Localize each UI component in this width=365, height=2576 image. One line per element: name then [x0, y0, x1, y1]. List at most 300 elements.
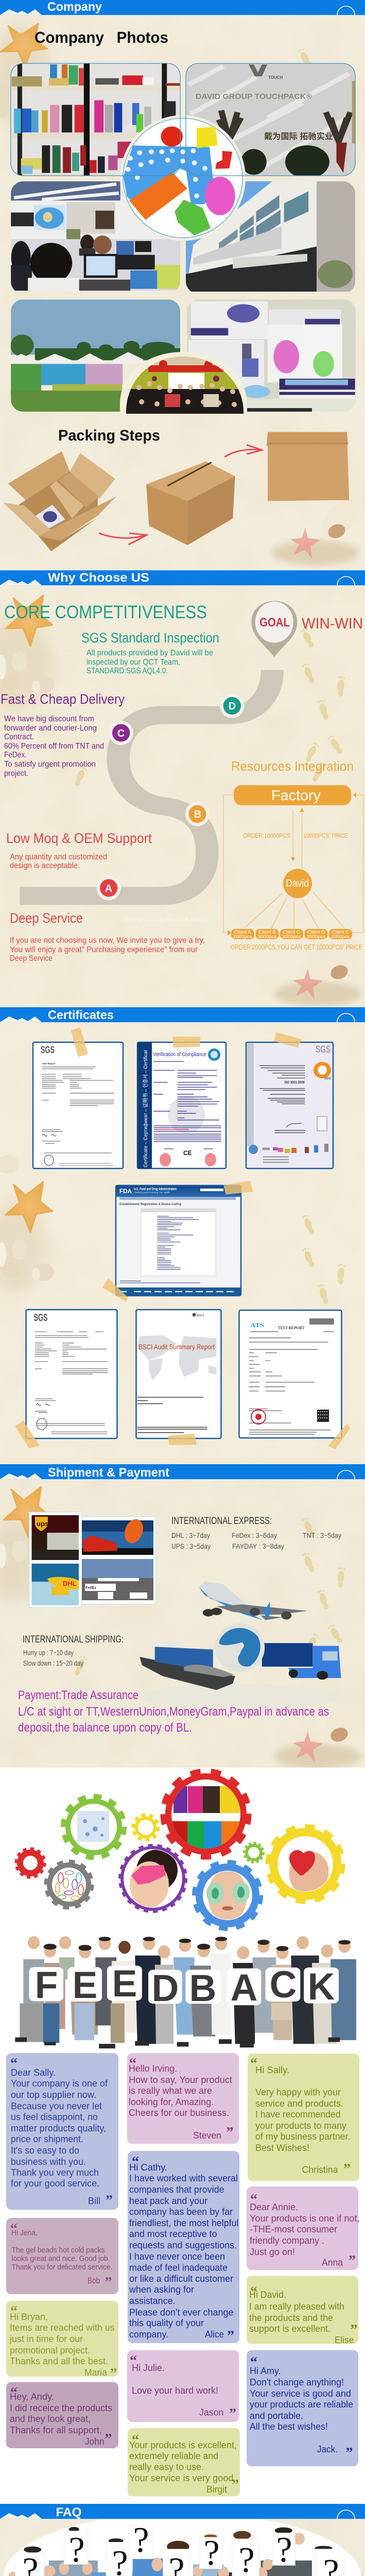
people group — [15, 1936, 356, 2048]
testimonial: Bill: our top supplier now. — [11, 2089, 96, 2100]
certificate: ATS test report: ATS — [250, 1321, 264, 1329]
decoration: seashell company — [0, 83, 11, 118]
testimonial: Alice: friendliest, the most helpful — [129, 2217, 239, 2228]
testimonial: Elise: support is excellent. — [249, 2323, 331, 2334]
testimonial: Jack: and portable. — [250, 2410, 303, 2421]
testimonial: Steven: How to say, Your product — [129, 2074, 232, 2085]
testimonial: Bob: “ — [10, 2221, 18, 2237]
certificate: FDA listing: Protecting and Promoting Your Health — [134, 1191, 170, 1194]
node: clients — [231, 929, 352, 940]
panel: sand background company section — [0, 15, 365, 570]
testimonial: Elise: I am really pleased with — [249, 2301, 344, 2312]
certificate: ISO 9001: ISO 9001:2008 — [284, 1080, 305, 1084]
gear: grey with carabiners — [46, 1862, 92, 1907]
photo panel outlines — [11, 63, 355, 176]
testimonial: Alice — [128, 2151, 239, 2344]
decoration: darker sand left side — [0, 26, 51, 1602]
heading: core competitiveness: CORE COMPETITIVENESS — [4, 602, 207, 622]
testimonial: Bob — [6, 2218, 118, 2294]
section header: FAQ — [0, 2504, 365, 2519]
testimonial: Bill: Thank you very much — [11, 2167, 99, 2178]
testimonial: John: “ — [10, 2385, 18, 2401]
testimonial: Bob: Hi Jena, — [11, 2229, 38, 2237]
badge B — [185, 802, 210, 826]
block: international express: DHL : 3~7day — [171, 1531, 210, 1539]
block: international shipping: Hurry up : 7~10 day — [23, 1649, 74, 1657]
block: international express: FAYDAY : 3~8day — [232, 1542, 284, 1550]
decoration: conch and pink starfish shipment — [274, 1695, 365, 1769]
testimonial: Maria: Thanks and all the best. — [10, 2355, 108, 2366]
testimonial: Alice: Hi Cathy. — [129, 2162, 167, 2173]
chart: resources integration diagram — [223, 758, 363, 951]
block: international shipping: INTERNATIONAL SHIPPING: — [23, 1634, 124, 1645]
decoration: seashells why choose us — [0, 652, 54, 693]
block: low moq and OEM support: Any quantity and customized — [10, 853, 107, 861]
testimonial: Jason: Love your hard work! — [132, 2385, 218, 2396]
icon: goal pin: GOAL — [259, 616, 290, 630]
decoration: starfish why choose us — [6, 596, 53, 646]
node: clients: 2000pcs — [307, 934, 325, 940]
testimonial: Christina: service and products. — [255, 2098, 343, 2109]
node: clients: 2000pcs — [258, 934, 276, 940]
testimonial: Steven: Hello Irving. — [129, 2063, 177, 2074]
testimonial: Alice: I have never once been — [129, 2251, 225, 2262]
certificate: FDA listing: U.S. Food and Drug Administration — [134, 1188, 177, 1191]
icon: truck — [262, 1643, 341, 1680]
certificate: verification of compliance: Certificate – Сертификат – 证明书 – 인증서 – Certificat — [143, 1050, 149, 1167]
node: factory: Factory — [271, 787, 321, 803]
block: international express: FeDex : 3~6day — [232, 1531, 277, 1539]
testimonial: Elise: “ — [250, 2284, 257, 2300]
word: FEEDBACK: C — [270, 1964, 297, 2006]
node: clients: Client D — [307, 929, 325, 935]
word: FEEDBACK: F — [35, 1964, 58, 2006]
testimonial: Maria: just in time for our — [9, 2333, 83, 2344]
block: international express — [171, 1516, 341, 1550]
testimonial: Steven: ” — [227, 2125, 234, 2141]
gear: small yellow — [133, 1815, 158, 1840]
label: order 10000: ORDER:10000PCS — [243, 832, 290, 839]
testimonial: Christina: of my business partner. — [255, 2131, 350, 2142]
certificate: SGS report: SGS — [41, 1045, 55, 1056]
sand grain company — [0, 15, 365, 570]
testimonial: Bob: Thank you for delicated service. — [11, 2263, 112, 2272]
block: fast and cheap delivery: To satisfy urgent promotion — [4, 760, 96, 769]
testimonial: Birgit: Your service is very good — [129, 2472, 234, 2483]
node: factory — [234, 785, 351, 805]
block: low moq and OEM support: design is acceptable. — [10, 861, 80, 870]
testimonial: Maria: Hi Bryan, — [10, 2311, 48, 2322]
connector lines — [223, 795, 363, 933]
block: deep service: You will enjoy a great" Purchasing experience" from our — [10, 945, 198, 954]
block: SGS standard inspection: STANDARD:SGS AQL4.0. — [86, 667, 168, 675]
panel: sand background why choose us section — [0, 585, 365, 1007]
testimonial: Alice: or like a difficult customer — [129, 2273, 233, 2284]
block: fast and cheap delivery: 60% Percent off from TNT and — [4, 742, 104, 751]
certificate: BSCI audit report — [136, 1310, 221, 1438]
node: clients: 2000pcs — [233, 934, 252, 940]
photo: office — [11, 181, 180, 292]
photo: FedEx orange plane — [82, 1517, 153, 1555]
testimonial: Bill: matter products quality, — [11, 2123, 106, 2133]
testimonial: Birgit: really easy to use. — [129, 2462, 204, 2472]
icon: airplane — [199, 1582, 307, 1620]
gear: blue with gel eye pads — [195, 1863, 260, 1928]
photo: UPS — [32, 1515, 79, 1560]
block: international shipping — [23, 1634, 124, 1667]
testimonial: John — [6, 2382, 118, 2448]
testimonial: Steven: Steven — [193, 2130, 221, 2141]
testimonial: Bill: ” — [106, 2193, 113, 2209]
gear: yellow with heart pack — [269, 1827, 342, 1901]
badge D — [220, 693, 244, 718]
testimonial: Bill: price or shipment. — [11, 2133, 83, 2144]
testimonial: Jack: Your service is good and — [250, 2388, 351, 2399]
client arrows — [245, 892, 344, 929]
certificate: verification of compliance: CE — [183, 1149, 192, 1157]
testimonial: Birgit — [128, 2428, 240, 2497]
certificate: ISO 9001: SGS — [324, 1077, 331, 1080]
testimonial: Bill: Because you never let — [11, 2100, 102, 2111]
testimonial: Maria — [6, 2301, 118, 2382]
decoration: conch and pink starfish why choose us — [274, 933, 365, 1006]
testimonial: Bill: for your good service. — [11, 2178, 99, 2189]
photo: product shelves — [11, 63, 180, 176]
testimonial: John: Hey, Andy. — [10, 2391, 54, 2402]
block: fast and cheap delivery: project. — [4, 769, 28, 778]
node: clients: 2000pcs — [282, 934, 301, 940]
word: FEEDBACK: E — [73, 1964, 97, 2006]
decoration: starfish shipment — [4, 1487, 50, 1537]
testimonial: Steven: Cheers for our business. — [129, 2107, 229, 2118]
gear: small green — [245, 1843, 263, 1862]
testimonial: Alice: assistance. — [129, 2295, 175, 2306]
road path — [20, 670, 272, 896]
sand mottling shipment — [0, 1479, 365, 1768]
question marks — [22, 2520, 339, 2576]
testimonial: Jack: Don't change anything! — [250, 2377, 344, 2387]
testimonial: Anna: Just go on! — [250, 2246, 295, 2257]
testimonial: Jack: Jack. — [317, 2444, 338, 2454]
testimonial: John: ” — [105, 2431, 112, 2447]
letter cards — [29, 1965, 339, 2005]
word: FEEDBACK: B — [189, 1968, 216, 2009]
certificate: FDA listing — [116, 1185, 241, 1296]
testimonial: John: John — [85, 2436, 104, 2447]
testimonial: Maria: Maria — [84, 2367, 108, 2378]
testimonial: Christina — [248, 2054, 359, 2181]
testimonial: Bill: business with you. — [11, 2156, 86, 2167]
block: low moq and OEM support: Low Moq & OEM Support — [6, 831, 152, 846]
certificate: BSCI audit report: BSCI Audit Summary Report — [138, 1343, 215, 1351]
panel: sand background FAQ section — [0, 2519, 365, 2576]
gear: green with clear bag — [64, 1797, 124, 1857]
photo: David Group wall: DAVID GROUP TOUCHPACK® — [196, 92, 312, 101]
icon: sealed carton — [267, 432, 349, 501]
certificate: FDA listing: Establishment Registration & Device Listing — [119, 1202, 181, 1206]
sand mottling why choose us — [0, 585, 365, 1007]
word: FEEDBACK: A — [231, 1967, 257, 2009]
watermark: designed by freepik.com — [124, 917, 205, 923]
testimonial: Steven: “ — [129, 2056, 136, 2072]
block: fast and cheap delivery: Fast & Cheap Delivery — [1, 691, 125, 707]
section header: FAQ: FAQ — [56, 2505, 81, 2519]
sand grain FAQ — [0, 2519, 365, 2576]
testimonial: Bob: looks great and nice. Good job. — [11, 2255, 110, 2263]
testimonial: Elise: the products and the — [249, 2312, 333, 2323]
testimonial: Christina: “ — [250, 2056, 257, 2072]
section header: Company: Company — [47, 0, 102, 14]
certificate: SGS report — [33, 1042, 123, 1168]
testimonial: Elise: ” — [350, 2322, 357, 2338]
node: clients: Client C — [283, 929, 300, 935]
photo: DHL: DHL — [63, 1580, 77, 1587]
gear: small red — [16, 1849, 44, 1877]
testimonial: Alice: ” — [227, 2328, 234, 2344]
testimonial: Jason: Hi Julie. — [132, 2362, 165, 2373]
testimonial: Jack: All the best wishes! — [250, 2421, 328, 2432]
photo: people holding question marks — [4, 2513, 361, 2576]
question marks: ? — [68, 2530, 85, 2570]
photo: DHL — [32, 1564, 79, 1605]
block: payment terms: Payment:Trade Assurance — [18, 1688, 138, 1702]
photo: retail packaging — [186, 299, 356, 413]
certificate: FDA listing: FDA — [119, 1188, 132, 1195]
certificate: verification of compliance: Verification of Compliance — [153, 1052, 206, 1058]
testimonial: Alice: made of feel inadequate — [129, 2262, 228, 2273]
certificate: SGS report two — [26, 1310, 117, 1438]
certificate: verification of compliance — [137, 1042, 226, 1168]
block: fast and cheap delivery: We have big discount from — [4, 715, 94, 723]
sand mottling FAQ — [0, 2519, 365, 2576]
word: FEEDBACK: K — [308, 1966, 335, 2008]
testimonial: Jack: your products are reliable — [250, 2399, 353, 2410]
certificate: ATS test report: TEST REPORT — [278, 1326, 305, 1330]
decoration: seashells certificates top — [0, 1155, 19, 1174]
certificate: BSCI audit report: BSCI — [197, 1314, 204, 1317]
photo: team outing — [10, 299, 180, 413]
block: fast and cheap delivery: Contract. — [4, 733, 34, 741]
testimonial: John: Thanks for all support. — [10, 2425, 102, 2435]
arrow: carton step one to two — [99, 533, 147, 545]
word: FEEDBACK: D — [152, 1968, 179, 2009]
photo: FedEx fleet: FedEx — [85, 1586, 96, 1590]
badge C — [109, 721, 133, 745]
section header: Certificates — [0, 1007, 365, 1023]
testimonial: Maria: ” — [110, 2366, 117, 2382]
sand mottling certificates — [0, 1022, 365, 1464]
testimonial: Jason: ” — [229, 2406, 236, 2422]
block: fast and cheap delivery — [1, 691, 125, 778]
testimonial: Maria: Items are reached with us — [10, 2322, 114, 2333]
testimonial: Bill: It's so easy to do — [11, 2145, 79, 2156]
node: clients: 2000pcs — [331, 934, 350, 940]
block: SGS standard inspection: SGS Standard Inspection — [81, 630, 219, 646]
arrowheads — [228, 792, 356, 936]
decoration: tapes on certificates — [15, 1027, 351, 1449]
testimonial: Anna: Anna — [322, 2257, 343, 2268]
photo: company building — [186, 181, 355, 292]
testimonial: Jack — [247, 2350, 358, 2466]
decoration: seashells shipment — [0, 1540, 54, 1582]
testimonial: Steven — [127, 2053, 239, 2144]
heading: Company Photos: Company Photos — [34, 28, 168, 46]
photo: annual meeting group — [120, 352, 247, 415]
heading: resources integration: Resources Integration — [231, 758, 354, 774]
sand grain certificates — [0, 1022, 365, 1464]
question marks: ? — [276, 2530, 292, 2570]
white cut below shipment section — [0, 1768, 365, 1799]
certificate: SGS report two: SGS — [34, 1312, 47, 1324]
block: low moq and OEM support — [6, 831, 152, 870]
testimonial: Alice: this quality of your — [129, 2317, 204, 2328]
section header: Shipment and Payment — [0, 1464, 365, 1480]
sand mottling company — [0, 15, 365, 570]
block: deep service: Deep Service — [10, 910, 83, 926]
testimonial: Anna: friendly company . — [250, 2235, 324, 2246]
testimonial: Bill: us feel disappoint, no — [11, 2111, 98, 2122]
decoration: starfish company — [1, 24, 47, 66]
testimonial: Bill — [6, 2053, 118, 2210]
testimonial: Bill: Your company is one of — [11, 2078, 108, 2089]
block: fast and cheap delivery: FeDex. — [4, 751, 27, 759]
photo: FedEx fleet — [82, 1559, 153, 1600]
decoration: conch and pink starfish company — [271, 492, 365, 565]
testimonial: Christina: Christina — [302, 2164, 338, 2175]
node: David — [283, 869, 312, 899]
testimonial: Alice: company. — [129, 2329, 168, 2340]
reflection — [140, 1684, 340, 1709]
decoration: seashells certificates — [0, 1239, 54, 1281]
testimonial: Christina: ” — [343, 2161, 351, 2177]
testimonial: Jason: “ — [130, 2353, 137, 2369]
testimonial: Alice: companies that provide — [129, 2184, 224, 2195]
panel: sand background certificates section — [0, 1022, 365, 1464]
testimonial: Maria: promotional project. — [10, 2345, 90, 2355]
testimonial: Birgit: “ — [132, 2432, 139, 2448]
block: payment terms — [18, 1688, 329, 1735]
panel: sand background shipment section — [0, 1479, 365, 1768]
testimonial: Anna — [247, 2187, 359, 2270]
testimonial: John: and they look great, — [10, 2413, 91, 2424]
illustration: people holding FEEDBACK letters — [15, 1936, 356, 2048]
testimonial: Bob: ” — [105, 2275, 112, 2291]
block: payment terms: deposit,the balance upon copy of BL. — [18, 1721, 192, 1735]
arrow: carton step two to three — [224, 445, 262, 457]
block: deep service: If you are not choosing us now, We invite you to give a try, — [10, 936, 205, 945]
icon: container ship — [140, 1641, 235, 1690]
decoration: starfish certificates — [6, 1182, 53, 1232]
block: international shipping: Slow down : 15~20 day — [23, 1659, 83, 1667]
testimonial: Anna: “ — [250, 2192, 257, 2208]
block: SGS standard inspection: inspected by our QCT Team, — [86, 658, 180, 667]
certificate: SGS report: SGS Report — [42, 1062, 56, 1065]
question marks: ? — [133, 2520, 149, 2560]
testimonial: Elise: Hi David. — [249, 2289, 286, 2300]
node: clients: Client E — [332, 929, 349, 935]
testimonial: Alice: when asking for — [129, 2284, 194, 2295]
block: SGS standard inspection: All products provided by David will be — [86, 649, 213, 657]
label: win-win: WIN-WIN — [302, 615, 363, 632]
testimonial: Bill: “ — [10, 2056, 18, 2072]
icon: closed carton — [146, 462, 235, 545]
block: international express: TNT : 3~5day — [303, 1531, 341, 1539]
photo: David Group wall — [186, 63, 355, 178]
testimonial: Bill: Bill — [88, 2195, 100, 2206]
testimonial: Elise: Elise — [335, 2334, 354, 2345]
testimonial: Alice: Alice — [205, 2329, 224, 2340]
badge C: C — [117, 728, 125, 739]
node: clients: Client A — [234, 929, 251, 935]
testimonial: Steven: is really what we are — [129, 2085, 212, 2096]
testimonial: Anna: ” — [349, 2253, 356, 2269]
word: FEEDBACK — [35, 1963, 335, 2009]
certificate: ATS test report — [239, 1310, 342, 1438]
testimonial: Anna: Dear Annie. — [250, 2201, 298, 2212]
testimonial: Jack: ” — [346, 2445, 353, 2461]
gear: purple with eye mask — [120, 1845, 186, 1911]
testimonial: Anna: -THE-most consumer — [250, 2224, 337, 2234]
illustration: airplane, globe, truck and ship — [140, 1582, 341, 1709]
testimonial: Alice: “ — [132, 2154, 139, 2170]
photo: David Group wall: 戴为国际 拓驰实业 — [264, 131, 333, 141]
badge A — [97, 876, 121, 900]
block: fast and cheap delivery: forwarder and courier-Long — [4, 724, 97, 733]
testimonial: Alice: heat pack and your — [129, 2195, 207, 2206]
section header: Company — [0, 0, 365, 15]
block: deep service — [10, 910, 205, 963]
testimonial: Christina: Hi Sally. — [255, 2064, 289, 2075]
testimonial: John: I did receice the products — [10, 2402, 112, 2413]
testimonial: Jack: Hi Amy. — [250, 2365, 281, 2376]
heading: Packing Steps: Packing Steps — [58, 427, 160, 444]
photo: UPS: ups — [37, 1520, 48, 1528]
testimonial: Christina: I have recommended — [255, 2109, 341, 2120]
testimonial: Birgit: Your products is excellent, — [129, 2439, 237, 2450]
certificate: ISO 9001 — [246, 1042, 333, 1168]
testimonial: Alice: Please don't ever change — [129, 2307, 234, 2317]
photo: gel pack products circle — [120, 115, 246, 241]
testimonial: Bob: Bob — [88, 2276, 100, 2285]
testimonial: Alice: company has been by far — [129, 2206, 233, 2217]
section header: Certificates: Certificates — [48, 1008, 114, 1022]
word: FEEDBACK: E — [112, 1963, 137, 2005]
sand grain why choose us — [0, 585, 365, 1007]
testimonial: Elise — [247, 2276, 358, 2345]
block: deep service: Deep Service — [10, 954, 53, 963]
testimonial: Alice: and most receptive to — [129, 2228, 217, 2239]
block: international express: UPS : 3~5day — [171, 1542, 211, 1550]
testimonial: Alice: requests and suggestions. — [129, 2240, 237, 2250]
testimonial: Maria: “ — [10, 2303, 18, 2319]
testimonial: Bob: The gel beads hot cold packs — [11, 2246, 105, 2255]
icon: open carton with product — [4, 451, 116, 551]
label: price 10000: 10000PCS' PRICE — [303, 832, 348, 839]
decoration: footprints — [73, 47, 359, 2576]
section header: Why Choose US — [0, 570, 365, 586]
testimonial: Jack: “ — [250, 2354, 257, 2370]
question marks: ? — [203, 2533, 220, 2573]
node: David: David — [286, 878, 309, 889]
block: SGS standard inspection — [81, 630, 219, 675]
photo: David Group wall: TOUCH — [268, 75, 283, 80]
testimonial: Birgit: ” — [232, 2477, 239, 2493]
icon: goal pin — [251, 601, 297, 657]
photo: courier collage — [29, 1512, 156, 1607]
certificate: ISO 9001: SGS — [316, 1044, 331, 1055]
badge A: A — [105, 883, 112, 894]
badge D: D — [229, 701, 236, 712]
